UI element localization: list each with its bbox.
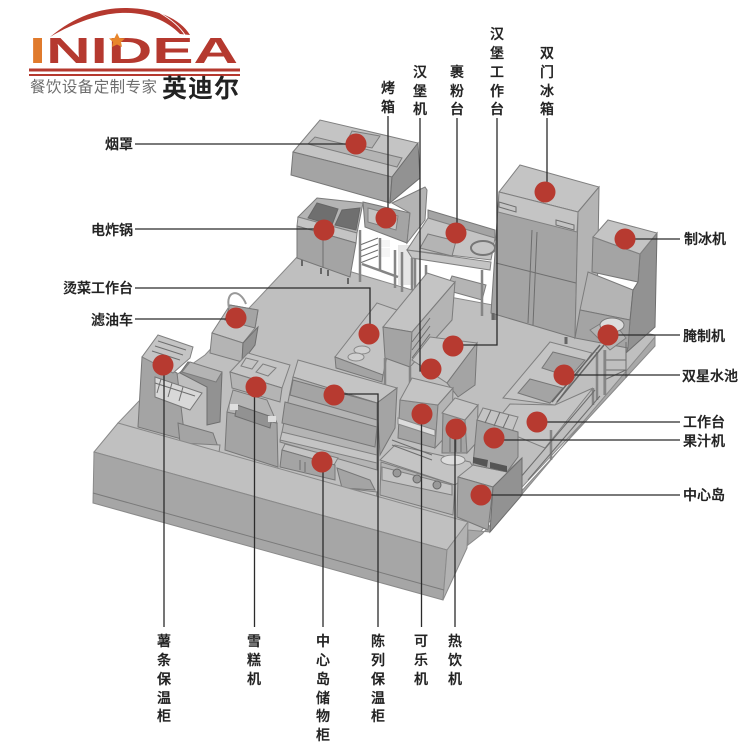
logo: INIDEA [29,8,240,103]
fryer [297,198,363,284]
center island storage [280,444,338,480]
labels: bottom vertical: 可乐机 [414,633,428,687]
breading table [407,210,495,320]
labels: right: 中心岛 [683,487,725,503]
labels: top vertical: 汉堡工作台 [490,26,504,117]
labels: left [63,136,133,328]
labels: top vertical: 烤箱 [381,80,395,115]
front counter [93,423,468,600]
labels: top vertical: 裹粉台 [450,64,464,117]
marinating machine [590,318,626,400]
labels: left: 烫菜工作台 [63,280,133,296]
labels: left: 滤油车 [91,312,133,328]
labels: right: 双星水池 [682,368,738,384]
red markers [152,134,636,506]
display warmer [280,360,397,470]
juice machine [473,408,518,472]
logo: INIDEA: INIDEA [29,30,238,71]
labels: left: 烟罩 [105,136,133,152]
ice maker [575,220,657,352]
labels: top vertical: 双门冰箱 [540,45,554,117]
leader lines [135,116,680,627]
labels: bottom vertical: 雪糕机 [247,633,261,687]
kitchen layout illustration [93,120,657,600]
labels: top vertical: 汉堡机 [413,64,427,117]
work table [492,388,600,480]
labels: right: 工作台 [683,414,725,430]
logo: INIDEA: 英迪尔 [162,75,239,103]
labels: right: 果汁机 [683,433,725,449]
cola machine [392,378,453,460]
takeaway boxes [170,423,377,513]
labels: right: 制冰机 [684,231,726,247]
labels: top vertical [381,26,554,117]
labels: right: 腌制机 [683,328,725,344]
fridge [491,165,599,344]
labels: right [682,231,738,503]
floor [118,256,655,540]
labels: bottom vertical: 薯条保温柜 [157,633,171,724]
hot drink machine [441,398,478,465]
double sink [503,342,604,405]
center island end [457,458,522,532]
burger work table [383,273,477,397]
cooking work table [335,303,397,382]
center cabinet [380,445,475,515]
filter cart [210,293,258,362]
labels: left: 电炸锅 [91,222,133,238]
labels: bottom vertical: 中心岛储物柜 [316,633,330,743]
logo: INIDEA: 餐饮设备定制专家 [30,78,157,96]
ice cream machine [225,353,290,467]
labels: bottom vertical: 热饮机 [448,633,462,687]
oven and rack [360,187,427,296]
fries warmer [138,335,222,440]
labels: bottom vertical: 陈列保温柜 [371,633,385,724]
hood [291,120,420,203]
labels: bottom vertical [157,633,462,743]
